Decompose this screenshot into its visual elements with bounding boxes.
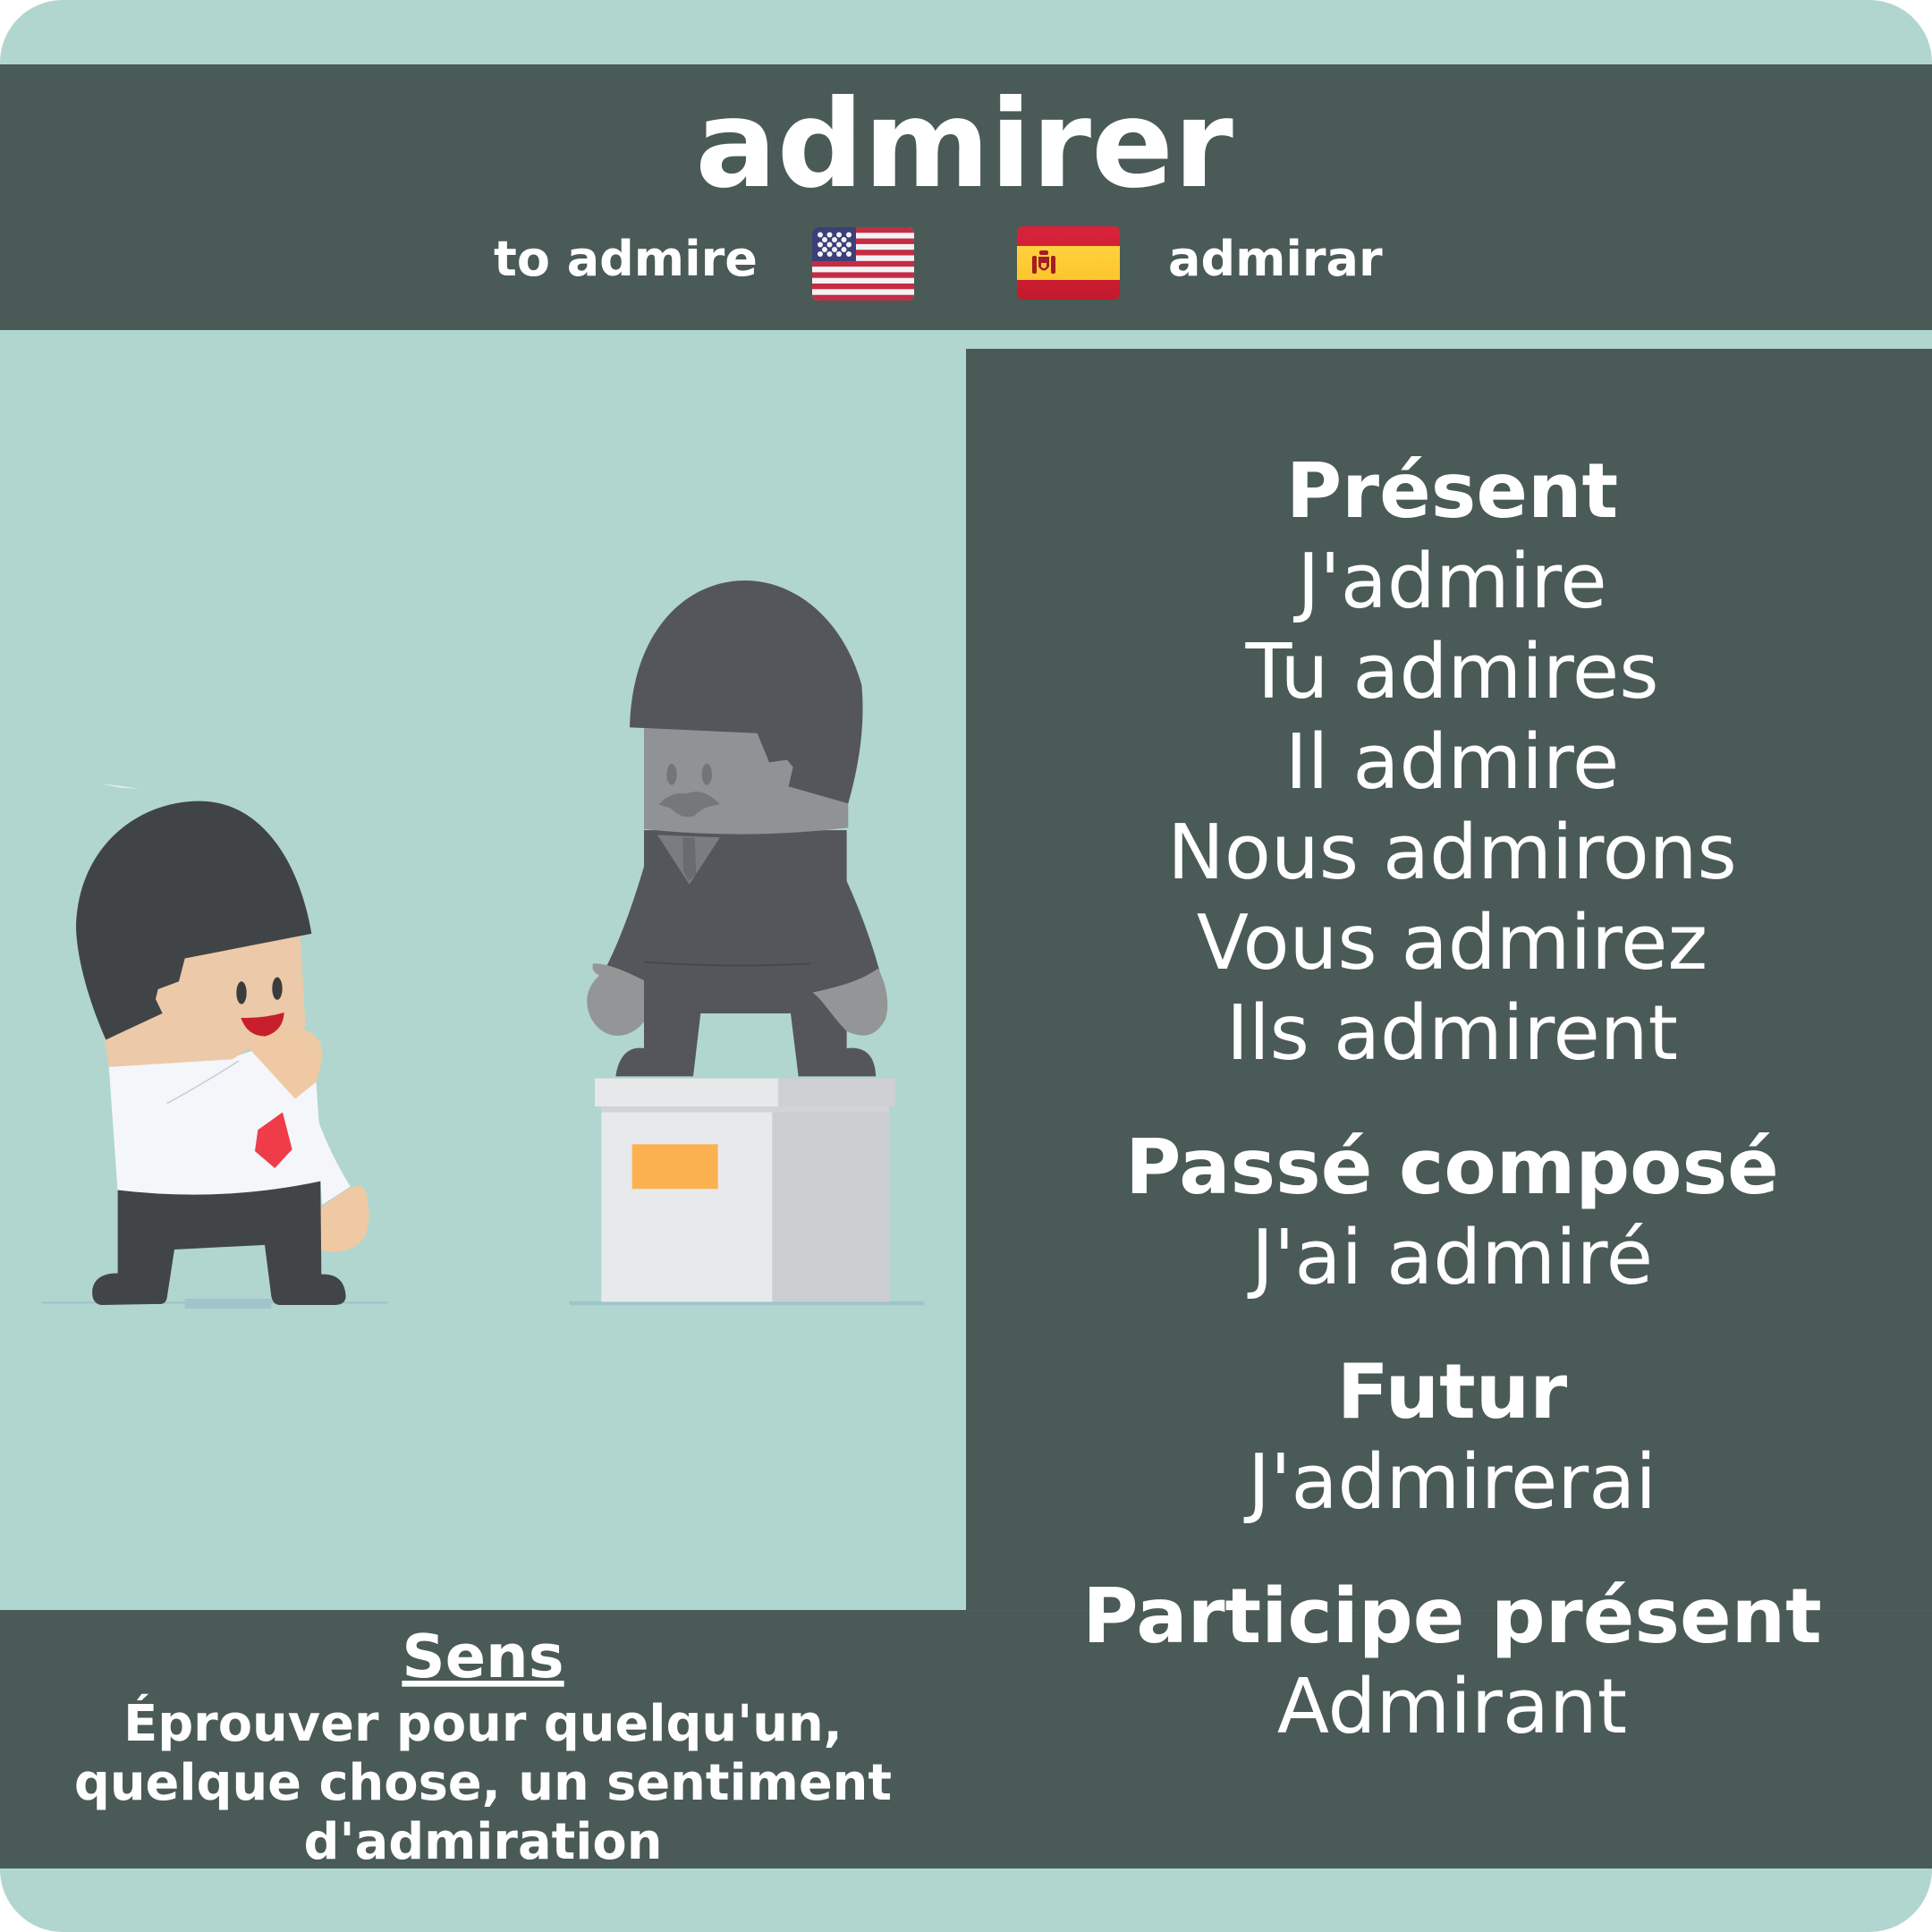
definition: quelque chose, un sentiment bbox=[74, 1754, 892, 1812]
statue body bbox=[615, 830, 876, 1076]
participe présent block: Admirant bbox=[1277, 1663, 1627, 1751]
hand bbox=[248, 1027, 322, 1099]
header band bbox=[0, 64, 1932, 330]
stray hair highlight bbox=[100, 784, 140, 789]
pedestal base right bbox=[772, 1111, 889, 1301]
trousers bbox=[92, 1182, 346, 1305]
heading: Sens: Sens bbox=[402, 1622, 564, 1691]
title: admirer bbox=[695, 73, 1233, 215]
statue hands bbox=[587, 963, 887, 1036]
panel: meaning bbox=[0, 1610, 966, 1871]
illustration: admiring man bbox=[42, 784, 387, 1309]
présent block: Présent bbox=[1286, 447, 1618, 536]
illustration: statue on pedestal bbox=[570, 580, 924, 1305]
passé composé block: J'ai admiré bbox=[1247, 1214, 1653, 1302]
shirt fold bbox=[167, 1061, 239, 1104]
présent block: J'admire bbox=[1292, 538, 1607, 626]
icon: US flag bbox=[812, 227, 914, 301]
statue eyes bbox=[666, 764, 677, 785]
futur block: J'admirerai bbox=[1243, 1438, 1657, 1527]
statue face bbox=[644, 728, 848, 835]
statue moustache bbox=[659, 792, 720, 817]
pedestal lid right bbox=[778, 1079, 895, 1106]
statue arms bbox=[606, 867, 879, 1000]
mouth bbox=[241, 1013, 284, 1037]
definition: d'admiration bbox=[304, 1813, 662, 1871]
statue collar bbox=[657, 835, 720, 885]
pedestal base left bbox=[601, 1111, 773, 1301]
hair bbox=[76, 801, 311, 1039]
Spanish translation: admirar bbox=[1168, 231, 1383, 287]
participe présent block bbox=[1082, 1572, 1822, 1751]
participe présent block: Participe présent bbox=[1082, 1572, 1822, 1661]
tie bbox=[255, 1113, 292, 1168]
icon: Spain flag bbox=[1017, 226, 1120, 300]
definition: Éprouver pour quelqu'un, bbox=[123, 1694, 843, 1753]
pedestal lid shadow bbox=[601, 1106, 889, 1113]
statue tie bbox=[682, 837, 696, 881]
plaque bbox=[632, 1144, 718, 1189]
definition bbox=[74, 1694, 892, 1871]
présent block: Ils admirent bbox=[1226, 989, 1678, 1078]
présent block: Nous admirons bbox=[1167, 809, 1737, 897]
passé composé block bbox=[1125, 1123, 1779, 1302]
présent block: Il admire bbox=[1285, 718, 1619, 807]
pedestal lid left bbox=[595, 1079, 778, 1106]
ground shadow bbox=[42, 1301, 387, 1303]
passé composé block: Passé composé bbox=[1125, 1123, 1779, 1212]
face bbox=[105, 925, 306, 1067]
présent block bbox=[1167, 447, 1737, 1078]
waist line bbox=[644, 962, 811, 966]
statue hair bbox=[630, 580, 863, 803]
présent block: Tu admires bbox=[1244, 628, 1659, 716]
eyes bbox=[236, 981, 247, 1004]
futur block bbox=[1243, 1348, 1657, 1527]
English translation: to admire bbox=[494, 231, 758, 287]
divider trace bbox=[966, 1610, 1932, 1611]
panel: conjugation bbox=[966, 349, 1932, 1868]
futur block: Futur bbox=[1337, 1348, 1567, 1436]
présent block: Vous admirez bbox=[1197, 899, 1707, 987]
fist bbox=[320, 1185, 369, 1251]
ground shadow bbox=[570, 1301, 924, 1305]
shirt bbox=[109, 1050, 351, 1205]
